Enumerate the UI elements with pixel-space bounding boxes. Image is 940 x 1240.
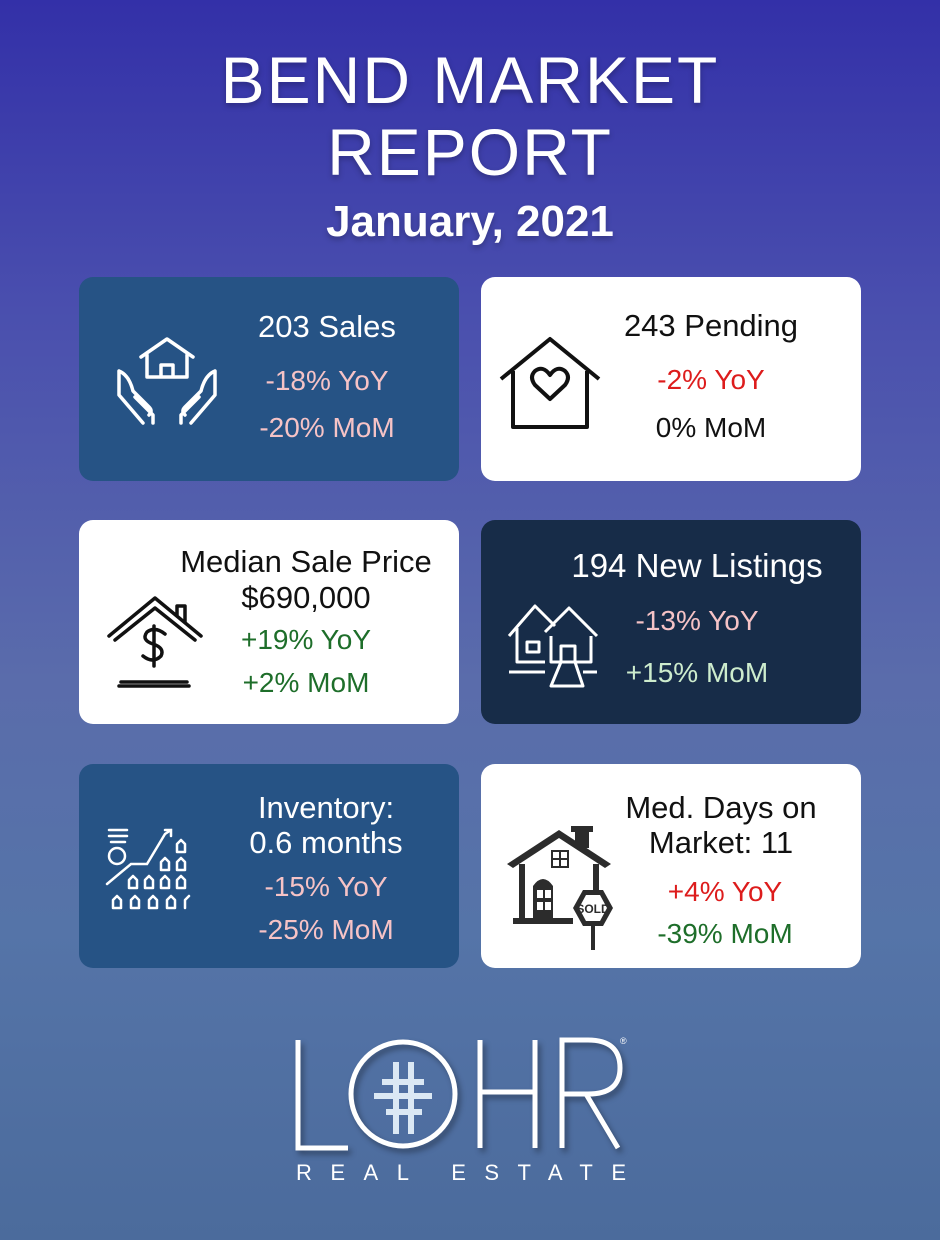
logo: lohr real estate: ®	[620, 1036, 627, 1046]
logo: lohr real estate: REAL ESTATE	[296, 1160, 626, 1185]
text: yoy: -15% YoY	[264, 871, 388, 902]
title: January, 2021	[326, 197, 614, 246]
text: 243 pending: 243 Pending	[624, 308, 798, 343]
icon: house dollar	[107, 596, 203, 688]
panel: sales	[79, 277, 459, 481]
text: mom: +2% MoM	[243, 667, 369, 698]
text: yoy: -18% YoY	[266, 365, 388, 396]
icon: hands house	[117, 337, 217, 425]
text: inventory: Inventory:	[258, 790, 394, 825]
text: median sale price: Median Sale Price	[180, 544, 432, 579]
text: market 11: Market: 11	[649, 825, 793, 860]
text: yoy: +4% YoY	[668, 876, 782, 907]
panel: days on market	[481, 764, 861, 968]
text: 203 sales: 203 Sales	[258, 309, 396, 344]
panel: inventory	[79, 764, 459, 968]
text: mom: -25% MoM	[258, 914, 394, 945]
text: mom: -39% MoM	[657, 918, 793, 949]
icon: house sold	[507, 826, 613, 950]
title: REPORT	[327, 115, 613, 189]
text: months: 0.6 months	[249, 825, 403, 860]
text: 194 new listings: 194 New Listings	[571, 547, 823, 584]
title: BEND MARKET	[221, 43, 719, 117]
text: yoy: -2% YoY	[657, 364, 765, 395]
logo: lohr real estate	[296, 1036, 628, 1185]
text: med days: Med. Days on	[625, 790, 817, 825]
panel: median sale price	[79, 520, 459, 724]
icon: houses growth	[106, 828, 190, 910]
text: yoy: -13% YoY	[636, 605, 758, 636]
text: mom: 0% MoM	[656, 412, 766, 443]
panel: new listings	[481, 520, 861, 724]
text: yoy: +19% YoY	[241, 624, 371, 655]
title	[221, 43, 719, 250]
icon: house sold: SOLD	[576, 902, 610, 916]
panel: pending	[481, 277, 861, 481]
icon: house heart	[500, 336, 600, 429]
text: mom: -20% MoM	[259, 412, 395, 443]
text: mom: +15% MoM	[626, 657, 768, 688]
text: price: $690,000	[241, 580, 371, 615]
icon: house path	[508, 604, 598, 688]
